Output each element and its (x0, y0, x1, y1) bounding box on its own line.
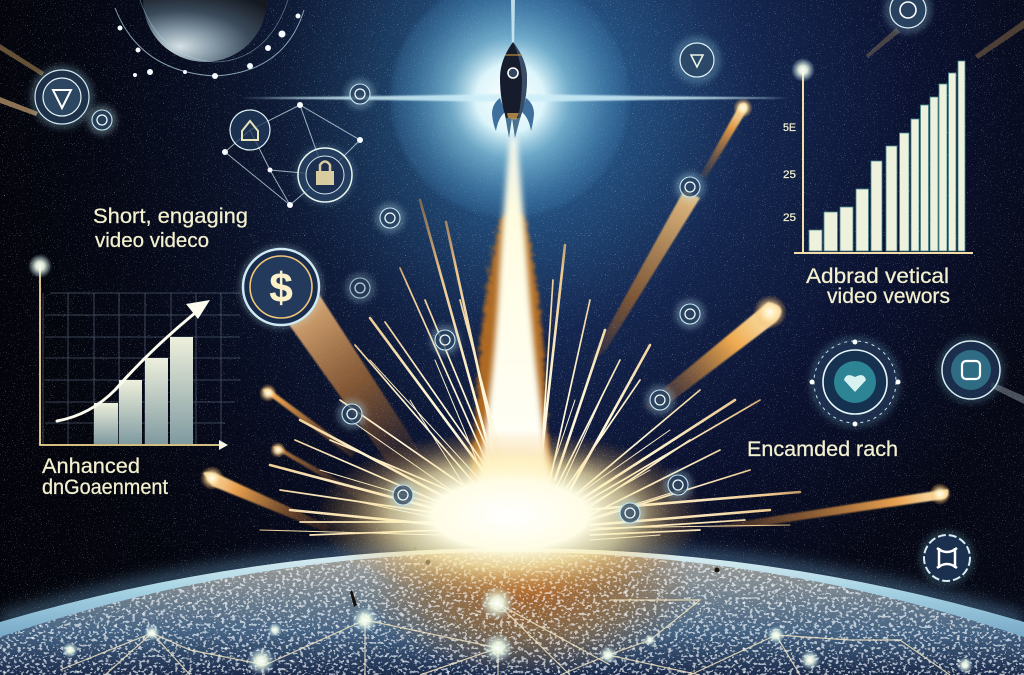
icon: dollar coin (239, 245, 323, 329)
rocket fins (492, 98, 505, 131)
dark debris (350, 546, 720, 607)
axis labels: 25 (783, 169, 796, 181)
icon: small left node (87, 105, 117, 135)
icon: shield badge left (30, 65, 94, 129)
text: enhanced engagement: dnGoaenment (42, 476, 168, 499)
icon: home badge (230, 110, 270, 150)
text: expanded reach: Encamded rach (747, 438, 898, 461)
axis labels: 5E (783, 122, 796, 134)
rocket nozzles (505, 115, 521, 138)
bright nodes (62, 586, 973, 675)
axis labels (783, 122, 796, 224)
text: short engaging video: video videco (95, 230, 209, 252)
chart bars (809, 61, 965, 251)
explosion glow (315, 430, 705, 600)
chart bars (94, 337, 193, 444)
network lines (60, 600, 950, 675)
icon: video badge (937, 336, 1005, 404)
text: vertical video views: video vewors (827, 285, 950, 308)
network links (225, 105, 360, 205)
chart axes (40, 268, 224, 445)
text: enhanced engagement (42, 455, 168, 499)
text: short engaging video (93, 205, 248, 252)
icon: lock badge (295, 145, 355, 205)
left chart: enhanced engagement (28, 254, 240, 450)
floating small icons (337, 172, 705, 528)
text: vertical video views (806, 265, 950, 308)
atmosphere arc (0, 548, 1024, 675)
comet streaks (0, 20, 1024, 532)
planet with orbit ring (115, 0, 304, 79)
chart grid (43, 293, 240, 445)
text: short engaging video: Short, engaging (93, 205, 248, 228)
icon: upper right corner badge (884, 0, 932, 34)
icon: reach heart badge (809, 336, 901, 428)
icon: network badge (919, 530, 975, 586)
network of icons (222, 102, 363, 208)
rising arrow (57, 300, 210, 421)
crowd of lights (0, 552, 1024, 675)
rocket (492, 42, 534, 138)
icon: top node (345, 79, 375, 109)
explosion rays (260, 200, 800, 540)
icon: dollar coin: $ (269, 264, 293, 311)
rocket window (508, 68, 518, 78)
flame column (464, 138, 560, 530)
planet surface with network (0, 538, 1024, 675)
rocket halo and lens flare (240, 0, 790, 220)
icon: top right badge (673, 36, 721, 84)
text: enhanced engagement: Anhanced (42, 455, 140, 478)
horizon glow (0, 548, 1024, 622)
axis labels: 25 (783, 212, 796, 224)
text: vertical video views: Adbrad vetical (806, 265, 949, 288)
rocket body (500, 42, 527, 118)
chart axes (794, 72, 973, 253)
right chart: vertical video views (783, 58, 973, 253)
